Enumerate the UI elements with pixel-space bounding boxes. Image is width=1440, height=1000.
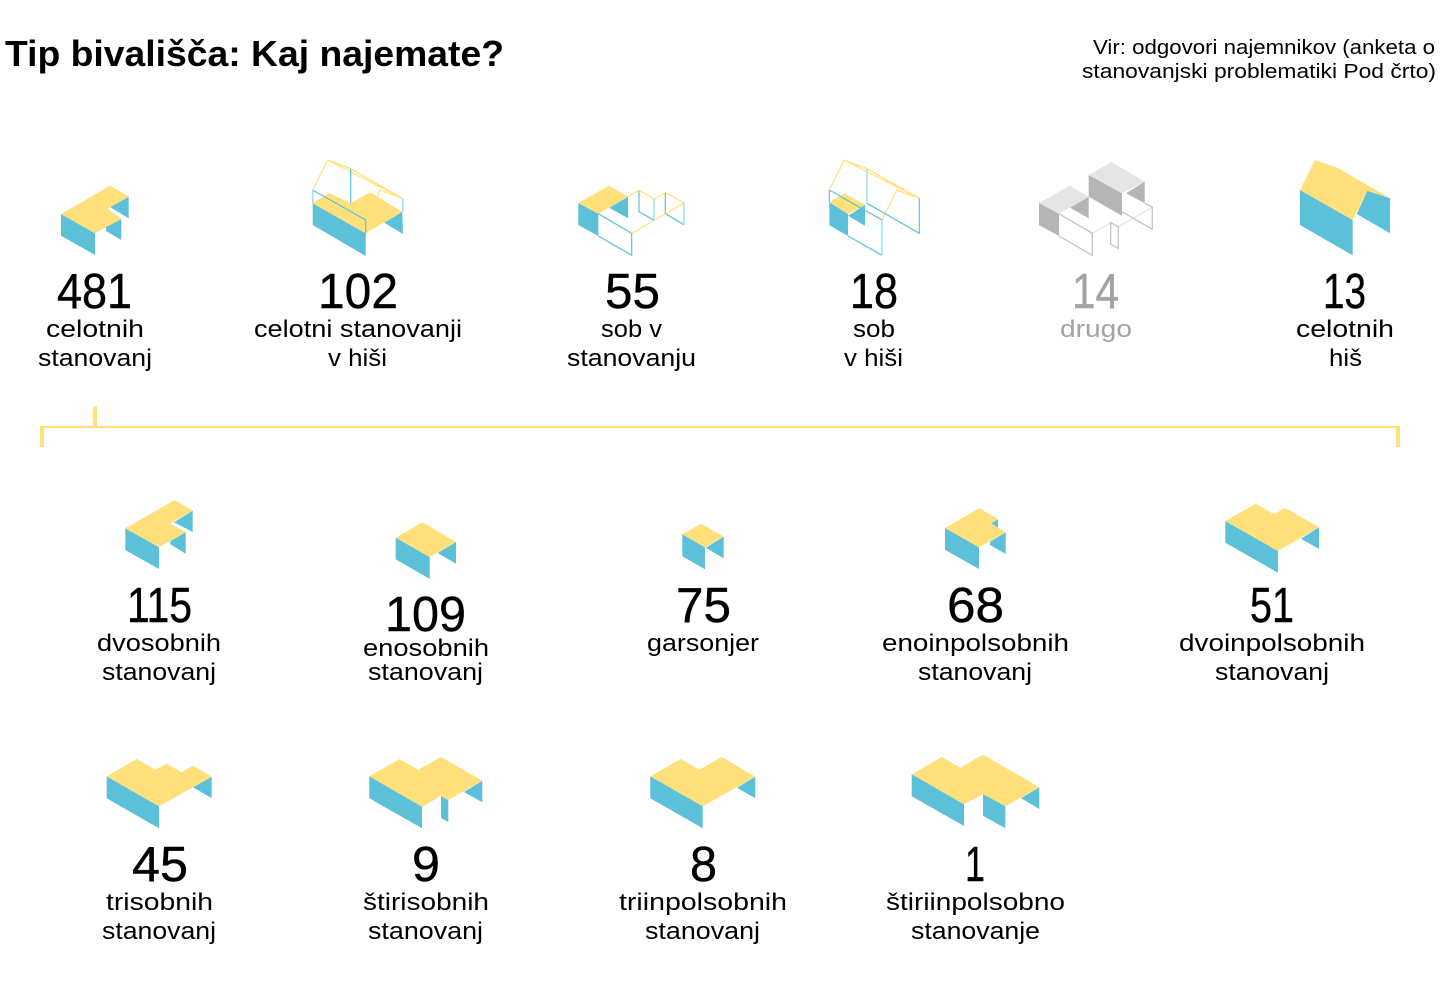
icon: apartment in house xyxy=(313,160,403,256)
number: 14 xyxy=(1072,265,1119,319)
icon: whole apartment xyxy=(61,186,129,255)
label: celotni stanovanji xyxy=(254,316,462,343)
label: stanovanj xyxy=(645,918,760,945)
label: stanovanj xyxy=(1215,659,1329,686)
number: 45 xyxy=(132,838,188,892)
icon: three-and-a-half-room xyxy=(650,757,755,828)
item: 55 sob v stanovanju xyxy=(567,186,696,372)
label: stanovanj xyxy=(918,659,1032,686)
label xyxy=(1296,316,1394,372)
number: 18 xyxy=(850,265,898,319)
label: enoinpolsobnih xyxy=(882,630,1069,657)
label: triinpolsobnih xyxy=(619,889,787,916)
item: 481 celotnih stanovanj xyxy=(38,186,152,372)
label: enosobnih xyxy=(363,635,489,662)
item: 8 triinpolsobnih stanovanj xyxy=(619,757,787,945)
label xyxy=(567,316,696,372)
label: stanovanj xyxy=(368,918,483,945)
item: 75 garsonjer xyxy=(647,524,759,657)
label: stanovanje xyxy=(911,918,1040,945)
label xyxy=(97,630,221,686)
number: 102 xyxy=(318,265,398,319)
label xyxy=(844,316,903,372)
label: štirisobnih xyxy=(363,889,489,916)
label: hiš xyxy=(1329,345,1362,372)
label: sob v xyxy=(601,316,662,343)
label xyxy=(38,316,152,372)
label: stanovanj xyxy=(38,345,152,372)
icon: whole house xyxy=(1300,160,1390,255)
number: 51 xyxy=(1250,579,1294,633)
label: garsonjer xyxy=(647,630,759,657)
item: 13 celotnih his xyxy=(1296,160,1394,372)
number: 68 xyxy=(947,579,1004,633)
number: 8 xyxy=(690,838,717,892)
number: 481 xyxy=(57,265,132,319)
label: stanovanj xyxy=(368,659,483,686)
label: sob xyxy=(853,316,895,343)
icon: studio xyxy=(682,524,724,569)
label: stanovanj xyxy=(102,918,216,945)
label xyxy=(363,889,489,945)
label: štiriinpolsobno xyxy=(886,889,1065,916)
label: dvosobnih xyxy=(97,630,221,657)
icon: two-and-a-half-room xyxy=(1225,504,1319,573)
number: 55 xyxy=(605,265,660,319)
item: 102 celotni stanovanji v hisi xyxy=(254,160,462,372)
icon: other, grey xyxy=(1039,162,1152,255)
item: 14 drugo xyxy=(1039,162,1152,343)
item: 115 dvosobnih stanovanj xyxy=(97,500,221,686)
icon: room in apartment xyxy=(578,186,684,255)
icon: one-and-a-half-room xyxy=(945,508,1006,569)
number: 75 xyxy=(676,579,731,633)
label xyxy=(886,889,1065,945)
item: 9 stirisobnih stanovanj xyxy=(363,757,489,945)
label: dvoinpolsobnih xyxy=(1179,630,1365,657)
item: 109 enosobnih stanovanj xyxy=(363,522,489,686)
label xyxy=(882,630,1069,686)
number: 109 xyxy=(385,588,466,642)
label: drugo xyxy=(1060,316,1132,343)
source note: Vir: odgovori najemnikov (anketa o xyxy=(1093,37,1435,59)
title: Tip bivališča: Kaj najemate? xyxy=(5,33,504,74)
label: v hiši xyxy=(844,345,903,372)
item: 18 sob v hisi xyxy=(829,160,919,372)
item: 45 trisobnih stanovanj xyxy=(102,759,216,945)
source note: stanovanjski problematiki Pod črto) xyxy=(1082,61,1436,83)
source note xyxy=(1082,37,1436,83)
item: 68 enoinpolsobnih stanovanj xyxy=(882,508,1069,686)
label xyxy=(254,316,462,372)
label: v hiši xyxy=(328,345,387,372)
label: celotnih xyxy=(1296,316,1394,343)
label: stanovanj xyxy=(102,659,216,686)
label xyxy=(619,889,787,945)
bracket xyxy=(40,406,1400,447)
item: 51 dvoinpolsobnih stanovanj xyxy=(1179,504,1365,686)
number: 115 xyxy=(127,579,192,633)
item: 1 stiriinpolsobno stanovanje xyxy=(886,755,1065,945)
label xyxy=(102,889,216,945)
label xyxy=(1179,630,1365,686)
number: 9 xyxy=(412,838,440,892)
icon: one-room xyxy=(396,522,456,579)
label xyxy=(363,635,489,686)
label: stanovanju xyxy=(567,345,696,372)
number: 13 xyxy=(1323,265,1366,319)
icon: three-room xyxy=(107,759,212,828)
label: trisobnih xyxy=(106,889,213,916)
icon: room in house xyxy=(829,160,919,255)
icon: two-room xyxy=(125,500,193,569)
icon: four-room xyxy=(369,757,482,828)
label: celotnih xyxy=(46,316,144,343)
number: 1 xyxy=(965,838,985,892)
icon: four-and-a-half-room xyxy=(912,755,1039,828)
